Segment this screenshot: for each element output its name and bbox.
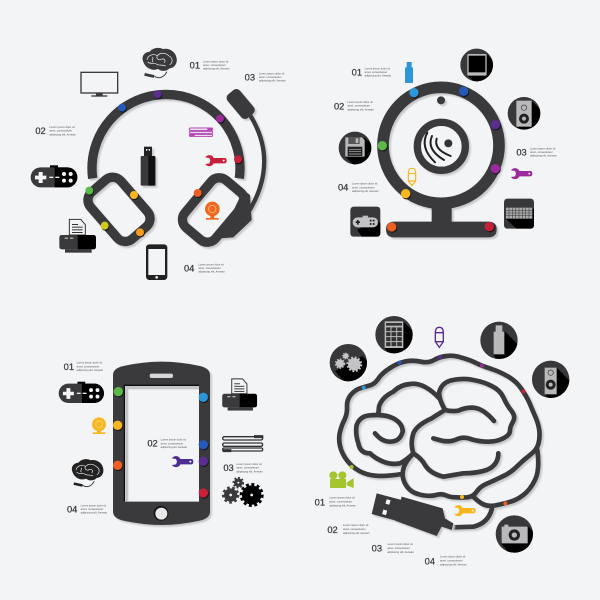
- label 04: amet, consectetuer: [198, 266, 221, 270]
- label 04: [425, 555, 467, 567]
- icon: speaker disc: [532, 360, 570, 398]
- label 01: amet, consectetuer: [203, 63, 226, 67]
- label 03: amet, consectetuer: [236, 466, 259, 470]
- label 04: adipiscing elit, Aenean: [352, 189, 379, 193]
- label 03: Lorem ipsum dolor sit: [387, 542, 413, 546]
- icon: calculator disc: [375, 316, 413, 354]
- label 02: amet, consectetuer: [347, 104, 370, 108]
- label 02: adipiscing elit, Aenean: [343, 531, 370, 535]
- label 01: amet, consectetuer: [365, 70, 387, 74]
- lens swirl: [425, 133, 452, 162]
- label 03: [516, 146, 557, 158]
- label 04: Lorem ipsum dolor sit: [352, 182, 378, 186]
- label 01: [64, 361, 104, 372]
- label 01: 01: [190, 60, 200, 70]
- label 02: adipiscing elit, Aenean: [347, 107, 374, 111]
- icon: printer: [222, 379, 257, 411]
- icon: game controller tile: [350, 206, 380, 237]
- label 03: 03: [245, 73, 255, 83]
- label 01: [315, 495, 356, 507]
- icon: floppy: [338, 132, 372, 164]
- label 04: Lorem ipsum dolor sit: [198, 262, 224, 266]
- label 01: adipiscing elit, Aenean: [77, 368, 104, 372]
- label 03: 03: [516, 147, 527, 157]
- headset: [84, 87, 264, 247]
- label 01: 01: [64, 362, 74, 372]
- label 01: [352, 66, 392, 78]
- label 03: 03: [223, 463, 234, 473]
- icon: monitor: [81, 72, 118, 97]
- label 03: [372, 542, 414, 554]
- label 01: adipiscing elit, Aenean: [329, 503, 356, 507]
- icon: speaker: [508, 97, 540, 130]
- icon: wrench: [205, 155, 227, 166]
- label 01: [190, 59, 230, 71]
- label 03: amet, consectetuer: [387, 546, 410, 550]
- label 04: 04: [338, 183, 348, 193]
- label 02: [334, 100, 374, 111]
- label 03: adipiscing elit, Aenean: [387, 550, 414, 554]
- icon: phone: [146, 244, 167, 280]
- colored dots: [378, 87, 500, 232]
- label 01: amet, consectetuer: [329, 499, 352, 503]
- colored dots: [85, 90, 242, 236]
- panel: brain infographic: [315, 316, 583, 576]
- label 03: 03: [372, 544, 382, 554]
- icon: wrench: [454, 505, 476, 516]
- icon: keyboard tile: [504, 198, 534, 229]
- icon: game controller: [31, 165, 77, 187]
- label 04: adipiscing elit, Aenean: [198, 270, 225, 274]
- icon: tablet: [460, 48, 493, 82]
- icon: video camera: [329, 471, 354, 488]
- icon: gears disc: [330, 344, 367, 382]
- label 04: adipiscing elit, Aenean: [440, 563, 467, 567]
- icon: game controller: [59, 382, 104, 403]
- label 03: Lorem ipsum dolor sit: [259, 71, 285, 75]
- icon: wrench: [172, 456, 193, 467]
- usb plug: [372, 493, 453, 536]
- label 02: amet, consectetuer: [49, 129, 72, 133]
- label 02: 02: [334, 101, 344, 111]
- label 02: 02: [147, 439, 158, 449]
- label 01: Lorem ipsum dolor sit: [203, 59, 229, 63]
- label 01: Lorem ipsum dolor sit: [329, 495, 355, 499]
- label 02: Lorem ipsum dolor sit: [347, 100, 373, 104]
- label 03: adipiscing elit, Aenean: [530, 154, 557, 158]
- label 04: [338, 182, 379, 193]
- icon: brain: [143, 48, 177, 78]
- label 02: [327, 523, 370, 535]
- colored dots: [350, 355, 525, 505]
- icon: pencil: [435, 327, 443, 347]
- smartphone: [113, 362, 210, 525]
- label 03: adipiscing elit, Aenean: [236, 469, 263, 473]
- label 02: adipiscing elit, Aenean: [49, 132, 76, 136]
- label 02: Lorem ipsum dolor sit: [161, 438, 186, 442]
- label 01: Lorem ipsum dolor sit: [365, 66, 390, 70]
- label 02: amet, consectetuer: [161, 441, 183, 445]
- label 04: amet, consectetuer: [352, 185, 375, 189]
- label 02: 02: [35, 126, 46, 136]
- label 02: Lorem ipsum dolor sit: [343, 523, 369, 527]
- colored dots: [113, 387, 208, 498]
- icon: cables: [189, 128, 213, 136]
- icon: printer: [59, 219, 96, 253]
- icon: webcam: [205, 202, 220, 220]
- label 03: amet, consectetuer: [259, 75, 282, 79]
- screen shading: [124, 385, 199, 502]
- label 02: [35, 125, 76, 136]
- home button: [154, 506, 168, 521]
- brain cable: [339, 356, 540, 527]
- label 01: adipiscing elit, Aenean: [203, 67, 230, 71]
- label 01: 01: [352, 68, 362, 78]
- panel: headset infographic: [31, 48, 286, 280]
- label 03: adipiscing elit, Aenean: [259, 79, 286, 83]
- label 03: Lorem ipsum dolor sit: [236, 462, 262, 466]
- panel: smartphone infographic: [59, 361, 263, 525]
- label 03: [223, 462, 263, 473]
- label 04: 04: [184, 263, 194, 273]
- label 02: amet, consectetuer: [343, 527, 366, 531]
- label 04: amet, consectetuer: [440, 559, 463, 563]
- speaker slot: [150, 374, 173, 378]
- label 04: 04: [425, 556, 435, 566]
- label 04: amet, consectetuer: [81, 507, 103, 511]
- icon: cables: [223, 437, 263, 451]
- icon: camera disc: [496, 515, 533, 553]
- label 04: adipiscing elit, Aenean: [81, 511, 108, 515]
- webcam: [383, 87, 499, 237]
- label 04: [184, 262, 225, 274]
- icon: pencil: [408, 168, 416, 186]
- label 01: amet, consectetuer: [77, 364, 99, 368]
- label 01: Lorem ipsum dolor sit: [77, 361, 102, 365]
- icon: brain: [72, 459, 103, 487]
- label 01: 01: [315, 497, 325, 507]
- label 02: 02: [327, 525, 338, 535]
- label 02: Lorem ipsum dolor sit: [49, 125, 75, 129]
- label 03: amet, consectetuer: [530, 150, 553, 154]
- label 04: 04: [67, 504, 77, 514]
- label 04: [67, 503, 108, 515]
- label 02: [147, 438, 188, 449]
- panel: webcam infographic: [334, 49, 558, 255]
- label 04: Lorem ipsum dolor sit: [81, 503, 106, 507]
- label 02: adipiscing elit, Aenean: [161, 445, 188, 449]
- icon: wrench: [511, 168, 532, 179]
- icon: usb stick: [141, 147, 155, 186]
- label 03: Lorem ipsum dolor sit: [530, 146, 556, 150]
- icon: usb disc: [480, 322, 518, 359]
- label 03: [245, 71, 286, 83]
- icon: blue usb: [405, 62, 413, 83]
- label 04: Lorem ipsum dolor sit: [440, 555, 466, 559]
- icon: webcam: [92, 417, 106, 434]
- label 01: adipiscing elit, Aenean: [365, 74, 392, 78]
- icon: gears: [224, 478, 261, 505]
